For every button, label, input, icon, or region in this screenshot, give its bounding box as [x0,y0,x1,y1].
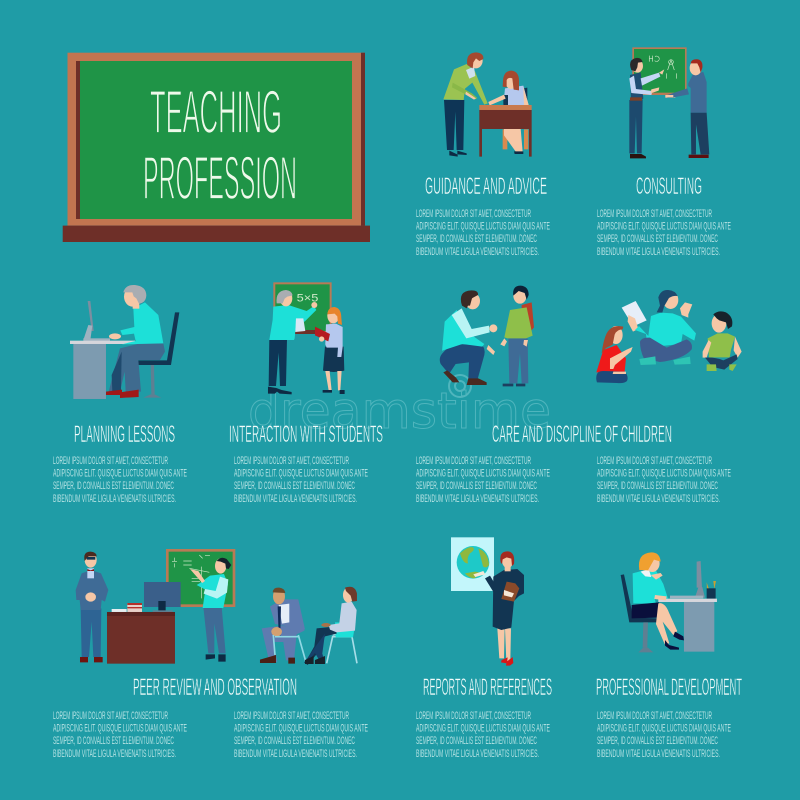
text: ADIPISCING ELIT. QUISQUE LUCTUS DIAM QUIS ANTE [416,220,550,232]
chalkboard title panel: PROFESSION [143,144,297,212]
text block: care and discipline left: LOREM IPSUM DOLOR SIT AMET, CONSECTETUR [416,455,531,467]
text: PEER REVIEW AND OBSERVATION [133,674,297,701]
illustration: consulting [629,47,709,158]
text block: care and discipline right [597,455,731,505]
text block: guidance and advice: BIBENDUM VITAE LIGULA VENENATIS ULTRICIES. [416,246,539,258]
text: INTERACTION WITH STUDENTS [229,421,383,448]
text: SEMPER, ID CONVALLIS EST ELEMENTUM. DONEC [234,480,355,492]
text: SEMPER, ID CONVALLIS EST ELEMENTUM. DONEC [53,480,174,492]
illustration: professional development [621,552,717,652]
text block: reports and references: LOREM IPSUM DOLOR SIT AMET, CONSECTETUR [416,710,531,722]
text block: interaction with students: LOREM IPSUM DOLOR SIT AMET, CONSECTETUR [234,455,349,467]
illustration: interaction with students: 5×5 [297,293,318,305]
text block: peer review left: BIBENDUM VITAE LIGULA VENENATIS ULTRICIES. [53,748,176,760]
watermark: dreamstime [248,382,551,440]
text: REPORTS AND REFERENCES [423,674,552,701]
illustration: peer review and observation [76,549,357,665]
text block: peer review right: LOREM IPSUM DOLOR SIT AMET, CONSECTETUR [234,710,349,722]
text: ADIPISCING ELIT. QUISQUE LUCTUS DIAM QUIS ANTE [234,722,368,734]
text block: interaction with students: BIBENDUM VITAE LIGULA VENENATIS ULTRICIES. [234,493,357,505]
text block: reports and references [416,710,550,760]
chalkboard title panel: TEACHING [150,78,282,146]
text: SEMPER, ID CONVALLIS EST ELEMENTUM. DONEC [234,735,355,747]
text block: care and discipline left [416,455,550,505]
illustration: reports and references [451,537,524,666]
text block: planning lessons: LOREM IPSUM DOLOR SIT AMET, CONSECTETUR [53,455,168,467]
text block: peer review left [53,710,187,760]
text: CONSULTING [636,173,702,200]
text: ADIPISCING ELIT. QUISQUE LUCTUS DIAM QUIS ANTE [234,468,368,480]
text: GUIDANCE AND ADVICE [425,173,547,200]
text block: consulting [597,208,731,258]
text block: peer review right: BIBENDUM VITAE LIGULA VENENATIS ULTRICIES. [234,748,357,760]
chalkboard title panel [63,53,370,242]
text: SEMPER, ID CONVALLIS EST ELEMENTUM. DONEC [416,735,537,747]
illustration: planning lessons [70,285,179,399]
illustration: children reading group [596,290,742,383]
illustration: guidance and advice [443,52,532,157]
text: ADIPISCING ELIT. QUISQUE LUCTUS DIAM QUIS ANTE [53,722,187,734]
text block: planning lessons [53,455,187,505]
text block: guidance and advice [416,208,550,258]
title [143,78,297,212]
text block: interaction with students [234,455,368,505]
text: SEMPER, ID CONVALLIS EST ELEMENTUM. DONEC [416,480,537,492]
text block: planning lessons: BIBENDUM VITAE LIGULA VENENATIS ULTRICIES. [53,493,176,505]
text: SEMPER, ID CONVALLIS EST ELEMENTUM. DONEC [53,735,174,747]
text block: reports and references: BIBENDUM VITAE LIGULA VENENATIS ULTRICIES. [416,748,539,760]
illustration: interaction with students [268,282,345,394]
text block: peer review left: LOREM IPSUM DOLOR SIT AMET, CONSECTETUR [53,710,168,722]
text block: guidance and advice: LOREM IPSUM DOLOR SIT AMET, CONSECTETUR [416,208,531,220]
text block: peer review right [234,710,368,760]
text block: professional development [597,710,731,760]
text: ADIPISCING ELIT. QUISQUE LUCTUS DIAM QUIS ANTE [416,722,550,734]
text: ADIPISCING ELIT. QUISQUE LUCTUS DIAM QUIS ANTE [416,468,550,480]
text: ADIPISCING ELIT. QUISQUE LUCTUS DIAM QUIS ANTE [53,468,187,480]
text: PLANNING LESSONS [74,421,175,448]
text block: care and discipline left: BIBENDUM VITAE LIGULA VENENATIS ULTRICIES. [416,493,539,505]
text: SEMPER, ID CONVALLIS EST ELEMENTUM. DONEC [416,233,537,245]
illustration: care and discipline [440,286,534,386]
